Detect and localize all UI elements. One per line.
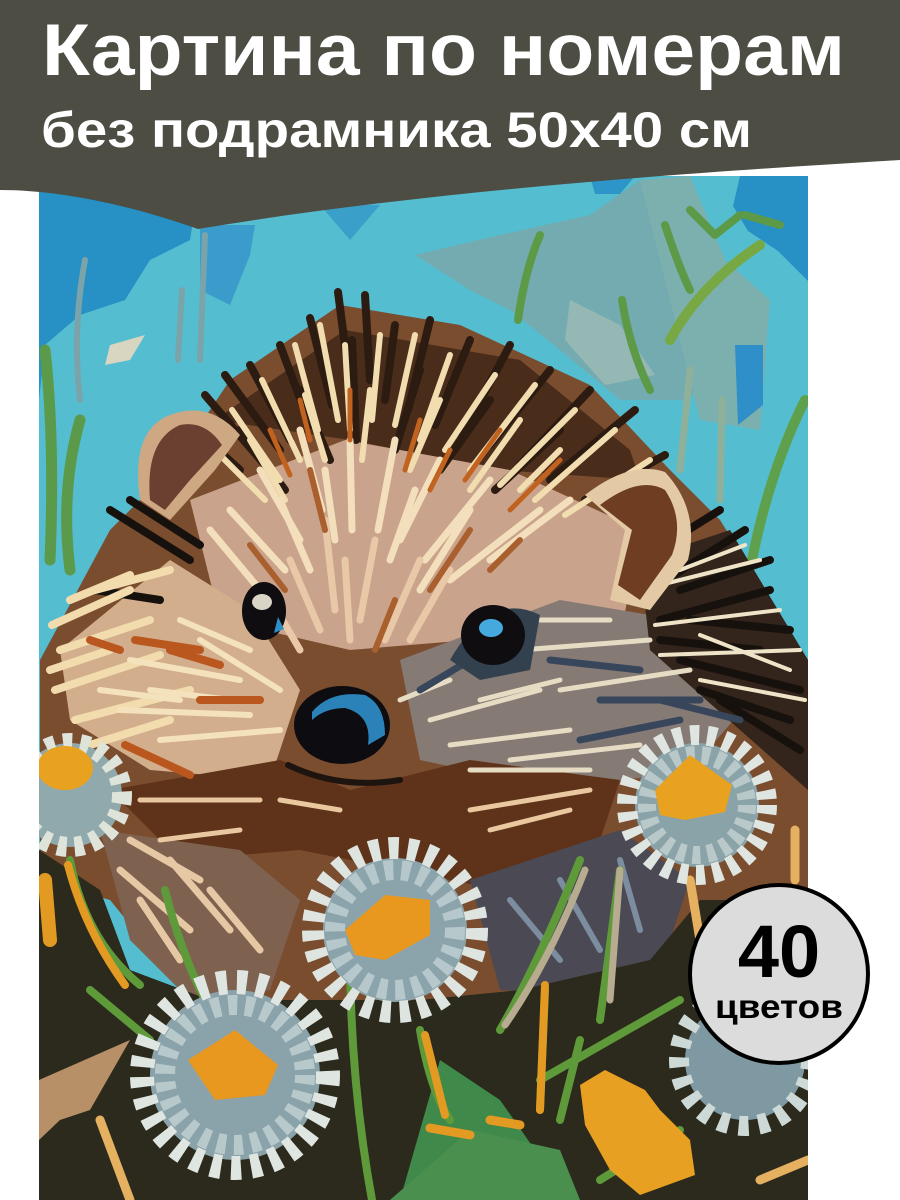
dandelion: lower left — [142, 982, 328, 1168]
badge: 40 colours — [690, 885, 868, 1063]
cream spines on dome — [50, 325, 805, 960]
foreground dark ground — [39, 850, 808, 1200]
sky background — [39, 176, 808, 988]
background grass — [45, 210, 805, 570]
dark spines on dome — [95, 292, 800, 750]
header banner — [0, 0, 900, 229]
dandelion: lower right — [679, 994, 811, 1126]
dandelion: left edge — [18, 743, 122, 847]
left ear — [138, 410, 240, 520]
title: Картина по номерам — [42, 10, 845, 91]
dandelion: centre — [313, 848, 477, 1012]
dandelion: right — [627, 735, 767, 875]
badge label: цветов — [715, 988, 843, 1025]
nose and mouth — [288, 686, 400, 783]
painting: hedgehog — [18, 176, 811, 1200]
badge number: 40 — [738, 910, 820, 993]
dark eye mask — [450, 608, 540, 680]
orange flower — [430, 1070, 695, 1195]
right eye — [461, 605, 525, 665]
right ear — [585, 469, 691, 610]
hedgehog body mass — [40, 305, 808, 1010]
left eye — [242, 582, 286, 640]
foreground grass — [39, 830, 808, 1200]
subtitle: без подрамника 50х40 см — [41, 102, 752, 158]
